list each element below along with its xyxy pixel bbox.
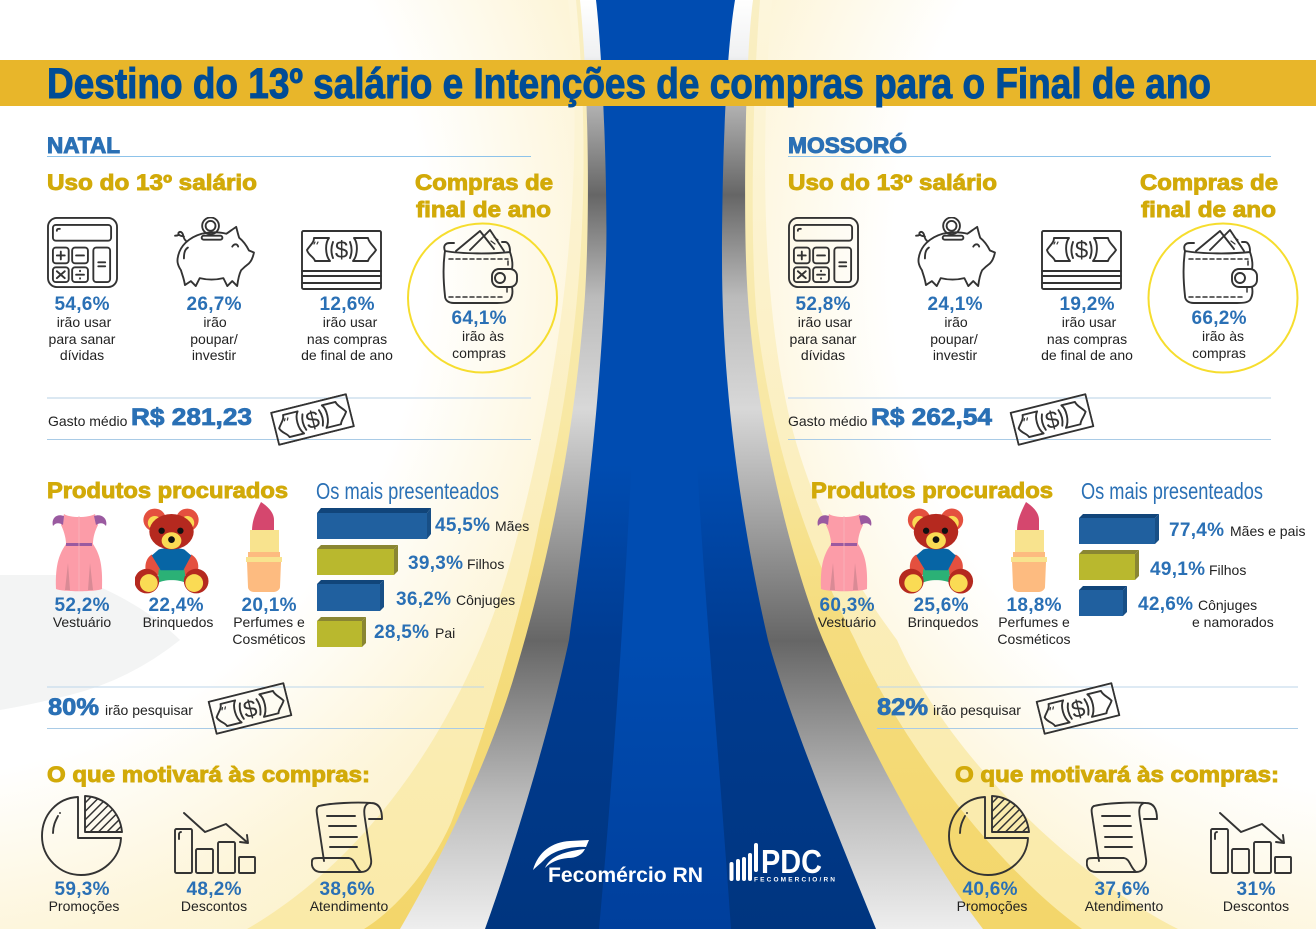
stat: 24,1% poupar: poupar/ xyxy=(930,331,978,347)
stat: 26,7% poupar: poupar/ xyxy=(190,331,238,347)
80% irão pesquisar xyxy=(47,683,484,734)
callout: 66,2% irão às compras: compras xyxy=(1192,345,1246,361)
stat: perfumes e cosméticos: 20,1% xyxy=(242,595,297,616)
bar chart: presenteados Natal: Pai xyxy=(435,625,455,641)
stat: vestuário: Vestuário xyxy=(53,614,111,630)
gasto médio: Gasto médio xyxy=(788,413,868,429)
stat: promoções: Promoções xyxy=(957,898,1027,914)
bar chart: presenteados Natal: 28,5% xyxy=(374,622,429,643)
heading: uso do 13º salário: Uso do 13º salário xyxy=(47,170,257,195)
82% irão pesquisar xyxy=(877,683,1298,734)
stat: brinquedos: Brinquedos xyxy=(908,614,978,630)
stat: 54,6% dívidas: irão usar xyxy=(57,314,112,330)
stat: 26,7% poupar: irão xyxy=(203,314,227,330)
heading: compras de final de ano: Compras de xyxy=(1140,170,1278,195)
stat: perfumes e cosméticos xyxy=(997,502,1071,647)
bar chart: presenteados Mossoró: Cônjuges xyxy=(1198,597,1257,613)
stat: 54,6% dívidas: dívidas xyxy=(60,347,104,363)
callout: 64,1% irão às compras: irão às xyxy=(462,328,504,344)
bar chart: presenteados Mossoró: Mães e pais xyxy=(1230,523,1305,539)
stat: brinquedos xyxy=(899,508,978,630)
logo: PDC Fecomercio RN: FECOMERCIO/RN xyxy=(754,876,835,884)
stat: vestuário xyxy=(53,514,111,630)
callout: 64,1% irão às compras: 64,1% xyxy=(452,308,507,329)
stat: 26,7% poupar: 26,7% xyxy=(186,294,242,315)
bar chart: presenteados Natal: Mães xyxy=(495,518,529,534)
bar chart: presenteados Natal xyxy=(317,508,529,647)
bar chart: presenteados Mossoró: 77,4% xyxy=(1169,520,1224,541)
bar chart: presenteados Natal: Cônjuges xyxy=(456,592,515,608)
stat: 19,2% compras: irão usar xyxy=(1062,314,1117,330)
stat: 24,1% poupar: investir xyxy=(933,347,978,363)
stat: brinquedos: Brinquedos xyxy=(143,614,213,630)
80% irão pesquisar: irão pesquisar xyxy=(105,702,193,718)
heading: produtos procurados: Produtos procurados xyxy=(811,478,1053,503)
callout: 66,2% irão às compras: irão às xyxy=(1202,328,1244,344)
heading: o que motivará às compras: O que motivará às compras: xyxy=(47,762,370,787)
heading: o que motivará às compras: O que motivará às compras: xyxy=(955,762,1279,787)
heading: os mais presenteados: Os mais presenteados xyxy=(316,478,499,504)
stat: promoções xyxy=(42,796,122,914)
stat: vestuário: 52,2% xyxy=(54,595,110,616)
stat: perfumes e cosméticos: Cosméticos xyxy=(232,631,306,647)
stat: 54,6% dívidas: para sanar xyxy=(49,331,116,347)
stat: vestuário xyxy=(818,514,876,630)
stat: perfumes e cosméticos xyxy=(232,502,306,647)
stat: 52,8% dívidas: irão usar xyxy=(798,314,853,330)
bar chart: presenteados Natal: 45,5% xyxy=(435,515,490,536)
stat: descontos xyxy=(1211,813,1291,914)
80% irão pesquisar: 80% xyxy=(48,694,99,721)
stat: descontos: Descontos xyxy=(181,898,247,914)
stat: promoções: 59,3% xyxy=(54,879,110,900)
bar chart: presenteados Natal: 36,2% xyxy=(396,589,451,610)
stat: atendimento: 38,6% xyxy=(320,879,375,900)
heading: os mais presenteados: Os mais presenteados xyxy=(1081,478,1263,504)
stat: promoções: Promoções xyxy=(49,898,119,914)
logo: Fecomércio RN xyxy=(533,840,703,887)
stat: atendimento: 37,6% xyxy=(1094,879,1150,900)
heading: compras de final de ano xyxy=(415,170,553,222)
gasto médio xyxy=(788,394,1271,445)
stat: 12,6% compras: 12,6% xyxy=(320,294,375,315)
stat: promoções: 40,6% xyxy=(962,879,1018,900)
bar chart: presenteados Natal: 39,3% xyxy=(408,553,463,574)
logo: PDC Fecomercio RN xyxy=(730,843,835,884)
callout: 64,1% irão às compras: compras xyxy=(452,345,506,361)
stat: atendimento: Atendimento xyxy=(310,898,389,914)
stat: brinquedos: 25,6% xyxy=(914,595,969,616)
stat: 19,2% compras: de final de ano xyxy=(1041,347,1133,363)
stat: 19,2% compras: nas compras xyxy=(1047,331,1127,347)
gasto médio xyxy=(47,394,531,445)
stat: brinquedos: 22,4% xyxy=(148,595,204,616)
stat: atendimento: Atendimento xyxy=(1085,898,1164,914)
stat: 24,1% poupar: 24,1% xyxy=(928,294,983,315)
stat: 52,8% dívidas: 52,8% xyxy=(796,294,851,315)
heading: Natal: NATAL xyxy=(47,133,120,158)
heading: compras de final de ano xyxy=(1140,170,1278,222)
panel: Mossoró xyxy=(788,133,1305,914)
heading: compras de final de ano: final de ano xyxy=(416,197,551,222)
stat: descontos: 31% xyxy=(1236,879,1276,900)
stat: 52,8% dívidas xyxy=(789,218,858,363)
stat: 12,6% compras: de final de ano xyxy=(301,347,393,363)
gasto médio: Gasto médio xyxy=(48,413,128,429)
82% irão pesquisar: irão pesquisar xyxy=(933,702,1021,718)
stat: vestuário: 60,3% xyxy=(820,595,875,616)
callout: 66,2% irão às compras: 66,2% xyxy=(1192,308,1247,329)
stat: atendimento xyxy=(310,803,389,914)
callout: 66,2% irão às compras xyxy=(1148,224,1298,372)
bar chart: presenteados Mossoró: 49,1% xyxy=(1150,559,1205,580)
stat: perfumes e cosméticos: 18,8% xyxy=(1006,595,1062,616)
stat: 12,6% compras: irão usar xyxy=(323,314,378,330)
stat: brinquedos xyxy=(135,509,213,630)
bar chart: presenteados Mossoró: 42,6% xyxy=(1138,594,1193,615)
stat: 12,6% compras xyxy=(301,231,393,363)
stat: 12,6% compras: nas compras xyxy=(307,331,387,347)
stat: descontos: Descontos xyxy=(1223,898,1289,914)
stat: descontos xyxy=(175,813,255,914)
stat: 52,8% dívidas: para sanar xyxy=(790,331,857,347)
stat: 24,1% poupar xyxy=(916,217,995,363)
stat: 54,6% dívidas xyxy=(48,218,117,363)
panel: Natal xyxy=(42,133,557,914)
stat: 54,6% dívidas: 54,6% xyxy=(54,294,110,315)
bar chart: presenteados Mossoró xyxy=(1079,514,1305,630)
heading: uso do 13º salário: Uso do 13º salário xyxy=(788,170,997,195)
callout: 64,1% irão às compras xyxy=(408,224,557,372)
stat: 26,7% poupar: investir xyxy=(192,347,237,363)
stat: perfumes e cosméticos: Perfumes e xyxy=(998,614,1070,630)
heading: produtos procurados: Produtos procurados xyxy=(47,478,288,503)
stat: perfumes e cosméticos: Cosméticos xyxy=(997,631,1071,647)
stat: 19,2% compras: 19,2% xyxy=(1060,294,1115,315)
gasto médio: R$ 281,23 xyxy=(131,404,252,431)
stat: descontos: 48,2% xyxy=(186,879,242,900)
logo: Fecomércio RN: Fecomércio RN xyxy=(548,863,703,887)
stat: 24,1% poupar: irão xyxy=(944,314,968,330)
heading: compras de final de ano: final de ano xyxy=(1141,197,1276,222)
heading: Mossoró: MOSSORÓ xyxy=(788,133,907,158)
stat: atendimento xyxy=(1085,803,1164,914)
bar chart: presenteados Mossoró: Filhos xyxy=(1209,562,1246,578)
bar chart: presenteados Natal: Filhos xyxy=(467,556,504,572)
logo: PDC Fecomercio RN: PDC xyxy=(761,843,822,880)
stat: promoções xyxy=(949,796,1029,914)
stat: 26,7% poupar xyxy=(175,217,254,363)
stat: perfumes e cosméticos: Perfumes e xyxy=(233,614,305,630)
stat: vestuário: Vestuário xyxy=(818,614,876,630)
heading: compras de final de ano: Compras de xyxy=(415,170,553,195)
stat: 19,2% compras xyxy=(1041,231,1133,363)
82% irão pesquisar: 82% xyxy=(877,694,928,721)
bar chart: presenteados Mossoró: e namorados xyxy=(1192,614,1274,630)
stat: 52,8% dívidas: dívidas xyxy=(801,347,845,363)
gasto médio: R$ 262,54 xyxy=(871,404,993,431)
